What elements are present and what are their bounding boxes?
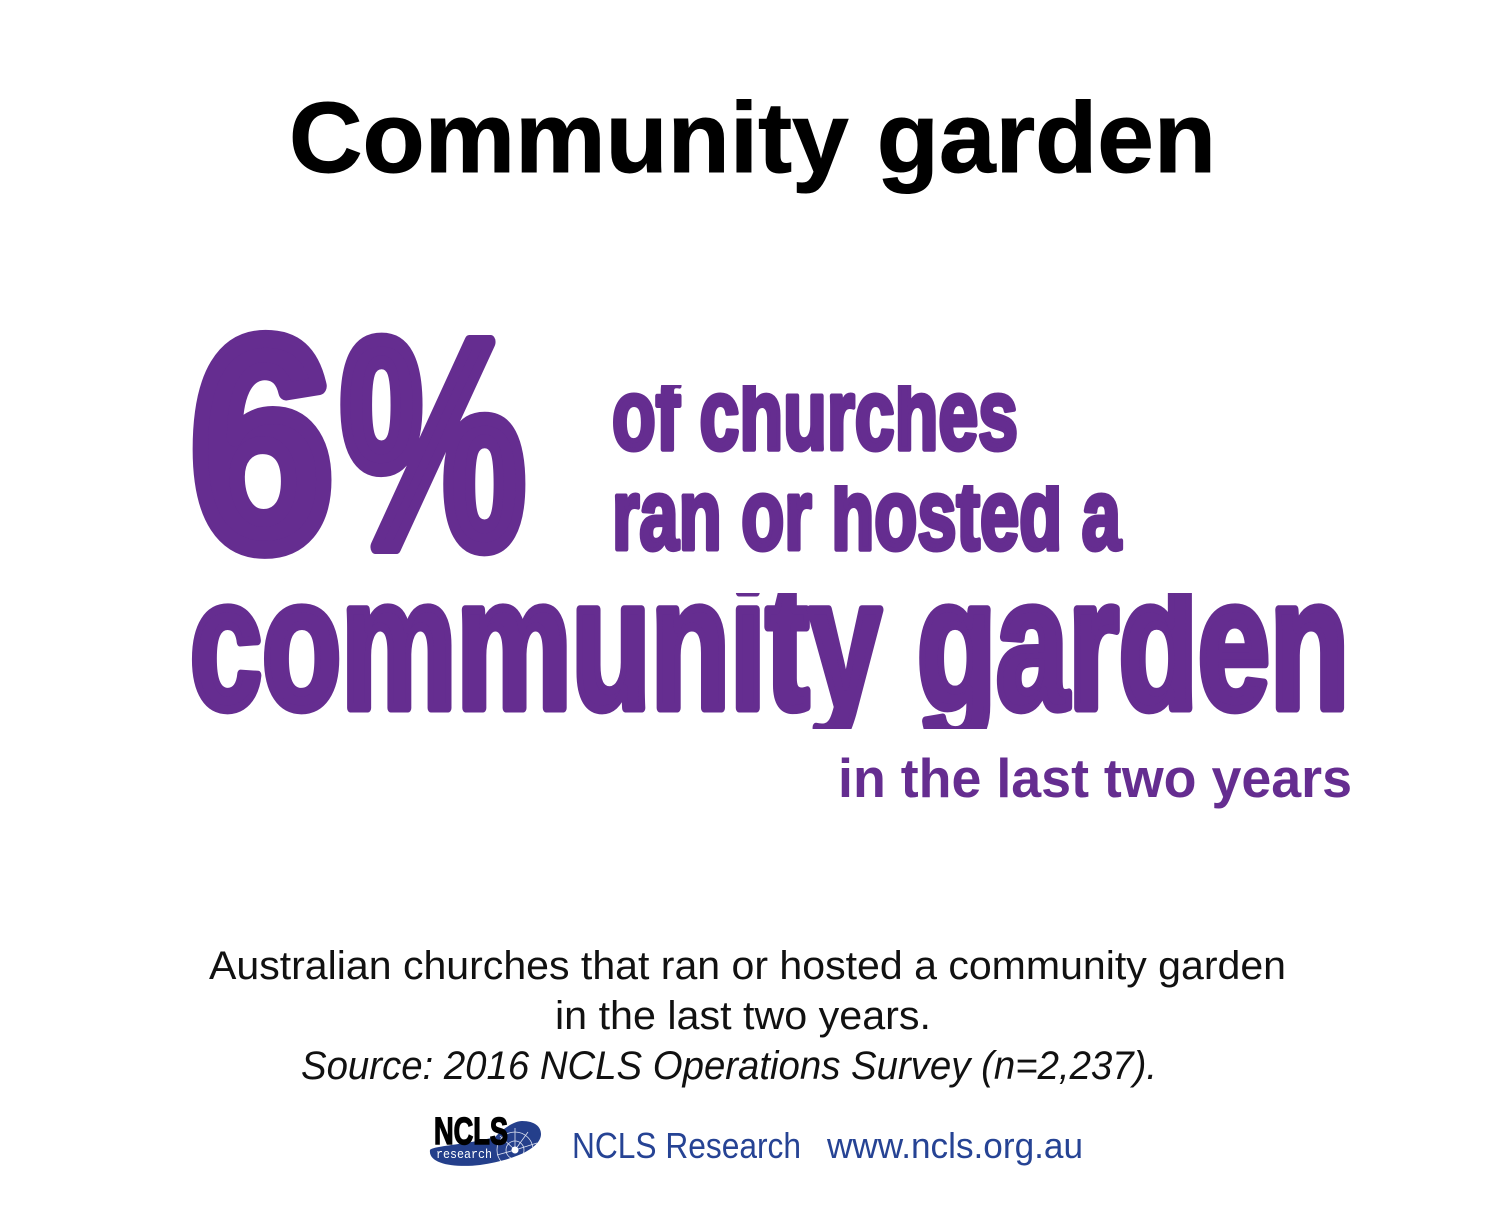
description text: in the last two years. <box>555 994 931 1038</box>
text: of churches: of churches <box>612 359 1018 471</box>
footer: website: www.ncls.org.au <box>826 1125 1083 1166</box>
icon: NCLS research logo: research <box>436 1148 492 1162</box>
icon: NCLS research logo <box>430 1116 541 1166</box>
text: ran or hosted a: ran or hosted a <box>612 459 1122 571</box>
text: in the last two years: in the last two years <box>838 747 1352 809</box>
description text: Australian churches that ran or hosted a community garden <box>209 944 1286 988</box>
icon: NCLS research logo: NCLS <box>434 1111 508 1153</box>
description text <box>209 944 1286 1088</box>
title: Community garden <box>289 82 1216 194</box>
big statistic: 6%: % <box>340 278 526 611</box>
big statistic: 6%: 6 <box>191 278 333 611</box>
source line: Source: 2016 NCLS Operations Survey (n=2,237). <box>301 1044 1157 1088</box>
footer: NCLS Research: NCLS Research <box>572 1125 801 1166</box>
big statistic: 6% <box>191 278 526 611</box>
